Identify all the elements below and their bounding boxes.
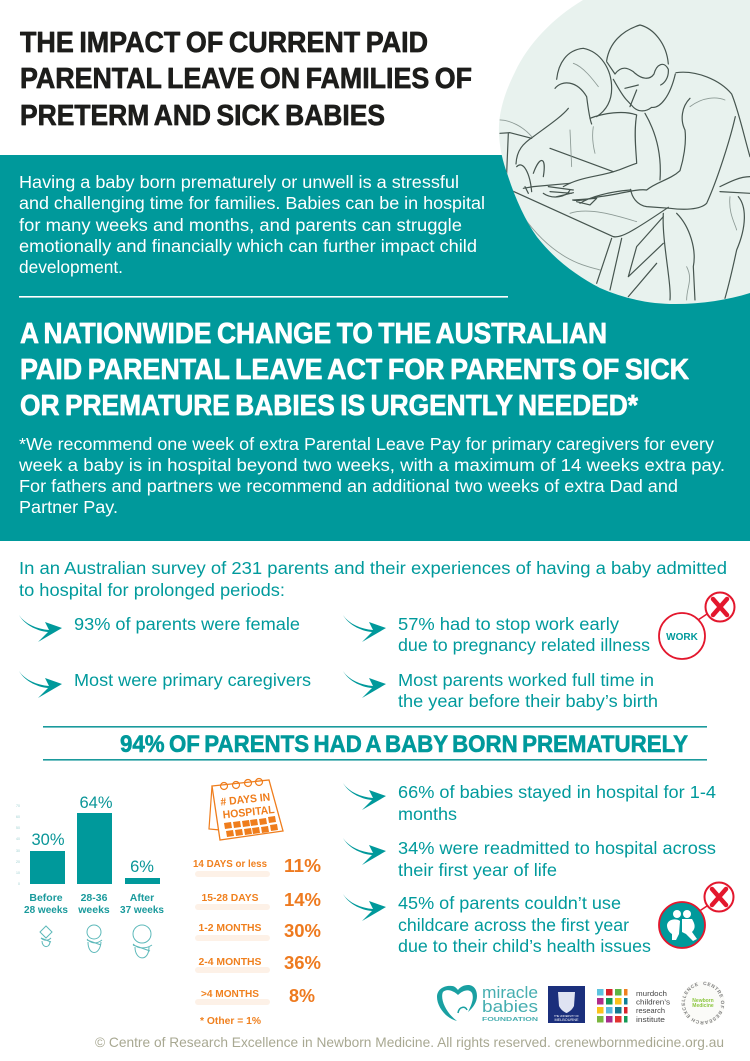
logo: Murdoch Children's Research Institute: institute: [636, 1015, 665, 1024]
stat: 45% childcare: due to their child’s health issues: [398, 936, 651, 956]
stat: 34% readmitted: [398, 838, 716, 880]
category labels: 37 weeks: [120, 904, 164, 916]
bar values: [31, 794, 154, 876]
recommendation text: Partner Pay.: [19, 497, 118, 517]
title: PARENTAL LEAVE ON FAMILIES OF: [20, 63, 472, 95]
icon: calendar: [209, 778, 283, 840]
row: over 4 months: 8%: [289, 985, 315, 1006]
row: 2-4 months: 2-4 MONTHS: [198, 956, 262, 968]
stat: 45% childcare: 45% of parents couldn’t use: [398, 893, 621, 913]
stat: worked full time: [398, 670, 658, 711]
stat: 45% childcare: [398, 893, 651, 956]
logo: Miracle Babies Foundation: babies: [482, 997, 538, 1016]
row: 15-28 days: 14%: [284, 889, 321, 910]
arrow: [343, 615, 386, 642]
stat: 93% female: 93% of parents were female: [74, 614, 300, 634]
intro paragraph: development.: [19, 257, 123, 277]
axis labels: 20: [16, 860, 20, 864]
axis labels: [16, 804, 20, 886]
row: 14 days or less: 14 DAYS or less: [193, 858, 267, 870]
call to action heading: [20, 318, 689, 422]
call to action heading: A NATIONWIDE CHANGE TO THE AUSTRALIAN: [20, 318, 607, 350]
stat: 34% readmitted: their first year of life: [398, 860, 557, 880]
bar values: 30%: [31, 831, 65, 849]
title: THE IMPACT OF CURRENT PAID: [20, 27, 428, 59]
bar chart: gestation at birth: [16, 794, 164, 916]
category labels: 28-36: [81, 892, 108, 904]
recommendation text: *We recommend one week of extra Parental Leave Pay for primary caregivers for every: [19, 434, 714, 454]
recommendation text: week a baby is in hospital beyond two weeks, with a maximum of 14 weeks extra pay.: [18, 455, 725, 475]
table: days in hospital: [193, 855, 321, 1027]
row: 14 days or less: [193, 855, 321, 877]
category labels: weeks: [77, 904, 110, 916]
stat: 45% childcare: childcare across the first year: [398, 915, 629, 935]
logo: Murdoch Children's Research Institute: research: [636, 1006, 665, 1015]
intro paragraph: emotionally and financially which can further impact child: [19, 236, 477, 256]
stat: 66% stayed 1-4 months: [398, 782, 716, 824]
row: 15-28 days: [195, 889, 321, 910]
axis labels: 60: [16, 815, 20, 819]
axis labels: 10: [16, 871, 20, 875]
stat: stopped work early: [398, 614, 650, 655]
stat: worked full time: Most parents worked full time in: [398, 670, 654, 690]
stat: 66% stayed 1-4 months: 66% of babies stayed in hospital for 1-4: [398, 782, 716, 802]
section heading: 94% premature: 94% OF PARENTS HAD A BABY BORN PREMATURELY: [120, 731, 688, 758]
arrow: [343, 838, 386, 865]
circle background: [499, 0, 750, 304]
title: PRETERM AND SICK BABIES: [20, 100, 385, 132]
survey intro: to hospital for prolonged periods:: [19, 580, 285, 600]
logo: Newborn Medicine CRE: CENTRE OF RESEARCH EXCELLENCE: [682, 982, 724, 1024]
title: [20, 27, 472, 132]
axis labels: 30: [16, 849, 20, 853]
logo: Murdoch Children's Research Institute: [597, 989, 670, 1024]
arrow: [19, 671, 62, 698]
bar values: 6%: [130, 858, 154, 876]
arrow: [343, 671, 386, 698]
call to action heading: OR PREMATURE BABIES IS URGENTLY NEEDED*: [20, 390, 639, 422]
axis labels: 0: [18, 882, 20, 886]
stat: stopped work early: due to pregnancy related illness: [398, 635, 650, 655]
logo: Newborn Medicine CRE: Medicine: [692, 1003, 714, 1009]
arrow: [19, 615, 62, 642]
row: over 4 months: >4 MONTHS: [201, 988, 259, 1000]
axis labels: 40: [16, 837, 20, 841]
survey intro: In an Australian survey of 231 parents and their experiences of having a baby admitted: [19, 558, 727, 578]
line drawing: [500, 25, 750, 300]
logo: University of Melbourne: THE UNIVERSITY OF: [554, 1015, 579, 1018]
logo: Miracle Babies Foundation: miracle: [482, 983, 538, 1002]
footer copyright: © Centre of Research Excellence in Newborn Medicine. All rights reserved. crenewbornmedicine.org.au: [95, 1034, 724, 1050]
category labels: [24, 892, 164, 916]
intro paragraph: for many weeks and months, and parents can struggle: [19, 215, 462, 235]
call to action heading: PAID PARENTAL LEAVE ACT FOR PARENTS OF SICK: [20, 354, 689, 386]
logo: Murdoch Children's Research Institute: murdoch: [636, 989, 667, 998]
stat: 66% stayed 1-4 months: months: [398, 804, 457, 824]
footnote: other: * Other = 1%: [200, 1015, 262, 1027]
logo: Newborn Medicine CRE: Newborn: [692, 998, 714, 1004]
row: 15-28 days: 15-28 DAYS: [202, 892, 258, 904]
category labels: 28 weeks: [24, 904, 68, 916]
stat: worked full time: the year before their baby’s birth: [398, 691, 658, 711]
arrow: [343, 783, 386, 810]
bars: [30, 813, 160, 884]
icon: calendar: HOSPITAL: [222, 804, 275, 821]
icon: childcare crossed out: [659, 882, 734, 948]
arrow: [343, 894, 386, 921]
logo: Miracle Babies Foundation: FOUNDATION: [482, 1017, 538, 1023]
row: 2-4 months: [195, 952, 321, 973]
logo: Murdoch Children's Research Institute: children’s: [636, 998, 670, 1006]
axis labels: 50: [16, 826, 20, 830]
survey intro: [19, 558, 727, 600]
row: 14 days or less: 11%: [284, 855, 321, 876]
stat: 34% readmitted: 34% were readmitted to hospital across: [398, 838, 716, 858]
row: 1-2 months: 30%: [284, 920, 321, 941]
icon: calendar: # DAYS IN: [220, 791, 271, 809]
category labels: Before: [29, 892, 63, 904]
icon: work crossed out: WORK: [666, 632, 699, 643]
axis labels: 70: [16, 804, 20, 808]
row: 1-2 months: 1-2 MONTHS: [198, 922, 262, 934]
intro paragraph: [19, 172, 485, 277]
stat: primary caregivers: Most were primary caregivers: [74, 670, 311, 690]
icon: work crossed out: [659, 592, 734, 659]
logo: University of Melbourne: MELBOURNE: [554, 1018, 579, 1022]
intro paragraph: and challenging time for families. Babies can be in hospital: [19, 193, 485, 213]
category labels: After: [130, 892, 154, 904]
intro paragraph: Having a baby born prematurely or unwell is a stressful: [19, 172, 459, 192]
stat: stopped work early: 57% had to stop work early: [398, 614, 619, 634]
icon: swaddled babies: [40, 925, 152, 958]
row: over 4 months: [195, 985, 315, 1006]
logo: Miracle Babies Foundation: [437, 983, 538, 1023]
recommendation text: For fathers and partners we recommend an additional two weeks of extra Dad and: [19, 476, 678, 496]
bar values: 64%: [79, 794, 113, 812]
logo: University of Melbourne: [548, 986, 585, 1023]
row: 2-4 months: 36%: [284, 952, 321, 973]
recommendation text: [18, 434, 725, 517]
illustration: parents leaning over hospital cot: [499, 0, 750, 304]
row: 1-2 months: [195, 920, 321, 941]
teal header panel: [0, 155, 750, 541]
